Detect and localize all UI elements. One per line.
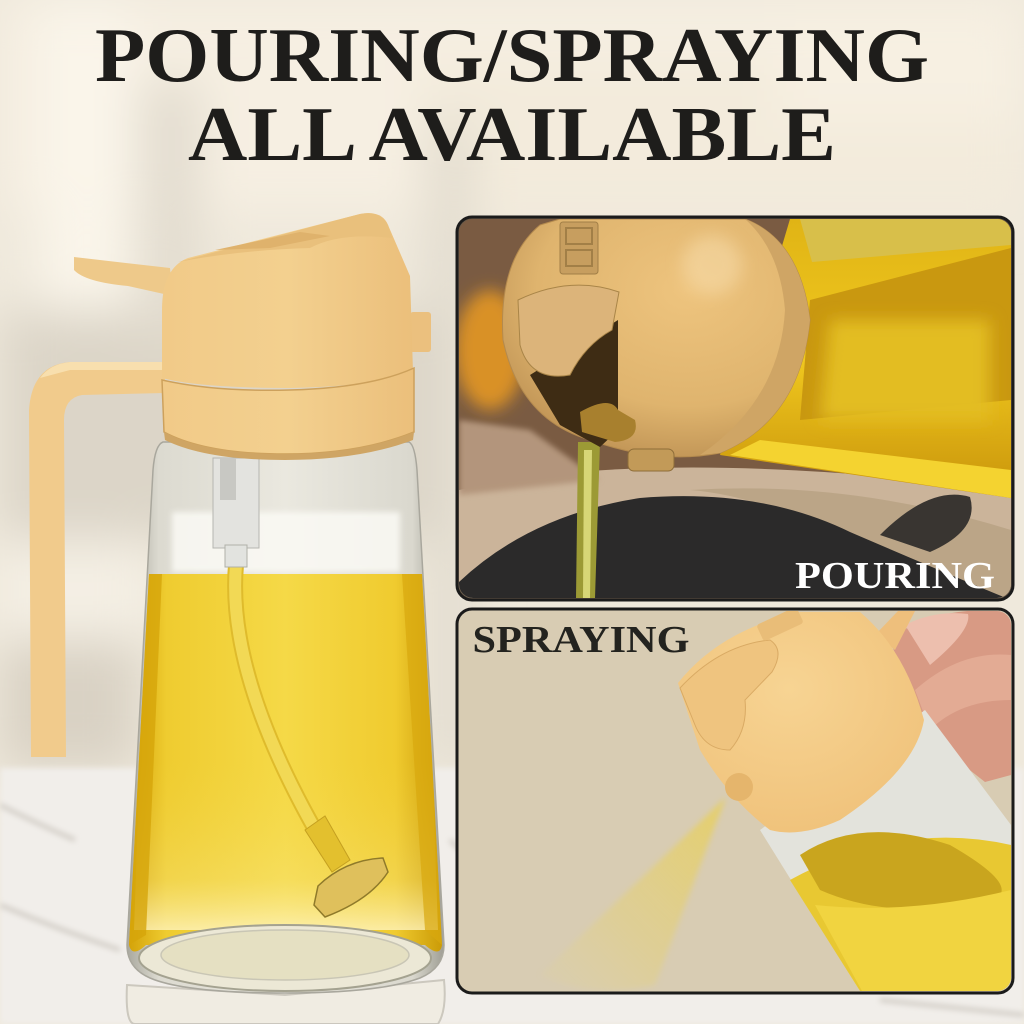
oil stream [576,442,600,598]
frying pan [459,496,1011,600]
side button [410,312,431,352]
handle [29,362,165,757]
panel: pouring [455,217,1013,600]
spray mist [540,797,726,991]
panel: spraying [457,607,1013,993]
spout tab [74,257,173,296]
title: ALL AVAILABLE [188,91,836,177]
title: POURING/SPRAYING [95,12,929,98]
hand [890,610,1011,782]
pump mechanism [213,458,259,567]
bottle: oil dispenser product [29,213,445,1024]
nozzle [725,773,753,801]
pour cap ball [502,219,810,457]
countertop scene [459,219,840,473]
upper glass band [172,512,400,572]
bottle reflection [127,980,445,1024]
dip tube [235,565,388,917]
title [95,12,929,177]
oil fill [129,574,442,952]
cap lower [162,368,414,454]
glass bottle [760,710,1011,991]
pebbles [690,488,1011,600]
glass body [127,442,444,993]
nozzle [628,449,674,471]
panel button [560,222,598,274]
cap upper [162,213,413,388]
caption spraying: SPRAYING [472,619,690,661]
caption pouring: POURING [795,555,995,597]
spray cap [678,612,924,832]
spout flap opening [530,320,618,447]
glass bottle [720,219,1011,498]
glass base [139,925,431,991]
